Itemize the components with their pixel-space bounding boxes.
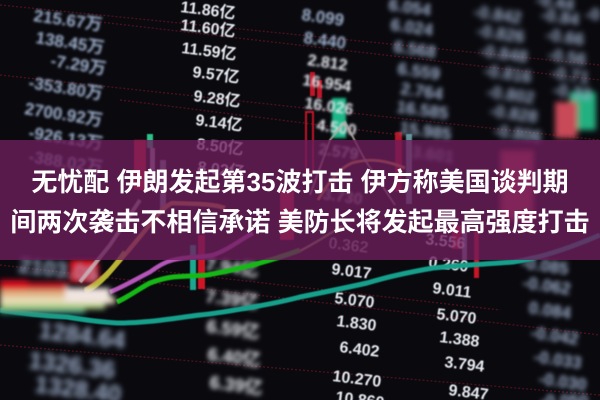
chart line: yellow xyxy=(85,252,125,292)
column 6 figures (blurred): -0.56 xyxy=(546,45,587,69)
lower column 4 figures: 3.794 xyxy=(444,354,485,376)
chart line: orange arc on right xyxy=(318,160,405,200)
lower centre figures (blurred) xyxy=(205,254,264,398)
lower left figures (blurred): 2103.05 xyxy=(17,252,99,287)
column 2 figures (hundred millions): 11.59亿 xyxy=(181,39,237,64)
lower column 5 figures (blurred): -0.030 xyxy=(537,369,588,395)
chart line: olive tail xyxy=(300,226,342,251)
lower left figures (blurred) xyxy=(17,252,127,400)
column 5 figures (blurred): -0.806 xyxy=(492,121,543,147)
column 5 figures (blurred): -0.842 xyxy=(472,2,523,28)
column 4 figures (blurred): 15.985 xyxy=(398,118,453,144)
lower column 5 figures (blurred): -0.062 xyxy=(521,273,572,299)
lower left figures (blurred): 1326.36 xyxy=(27,347,117,385)
lower column 3 figures xyxy=(328,235,385,400)
column 1 figures (ten-thousands): 138.45万 xyxy=(34,28,105,58)
column 3 figures: 16.026 xyxy=(303,95,354,119)
column 3 figures xyxy=(300,5,364,209)
lower column 3 figures: 6.402 xyxy=(339,339,380,361)
column 4 figures (blurred): 6.568 xyxy=(392,37,437,62)
column 1 figures (ten-thousands): -388.02万 xyxy=(27,147,104,178)
chart line: orange moving average xyxy=(85,203,225,290)
lower centre figures (blurred): 6.40亿 xyxy=(207,344,262,370)
column 6 figures (blurred): -0.71 xyxy=(549,63,590,87)
column 5 figures (blurred): -0.802 xyxy=(485,82,536,108)
column 3 figures: 8.099 xyxy=(300,5,345,30)
lower column 5 figures (blurred): -0.042 xyxy=(529,323,580,349)
lower centre figures (blurred): 7.39亿 xyxy=(205,286,260,312)
lower centre figures (blurred): 6.59亿 xyxy=(206,316,261,342)
column 5 figures (blurred): -0.848 xyxy=(478,41,529,67)
column 1 figures (ten-thousands): -353.80万 xyxy=(27,73,104,104)
column 2 figures (hundred millions): 9.28亿 xyxy=(193,87,242,111)
column 2 figures (hundred millions): 11.60亿 xyxy=(180,16,236,41)
column 4 figures (blurred): 6.559 xyxy=(396,59,441,84)
column 1 figures (ten-thousands): -926.13万 xyxy=(27,123,104,154)
column 5 figures (blurred): -0.828 xyxy=(488,101,539,127)
title: 间两次袭击不相信承诺 美防长将发起最高强度打击 xyxy=(10,207,590,237)
column 3 figures: 2.579 xyxy=(317,141,360,164)
chart line: green xyxy=(117,250,300,302)
column 1 figures (ten-thousands): -7.29万 xyxy=(49,51,107,79)
lower column 3 figures: 10.270 xyxy=(332,368,382,391)
column 3 figures: 2.812 xyxy=(306,52,349,75)
column 4 figures (blurred): 2.764 xyxy=(399,79,445,104)
column 5 figures (blurred) xyxy=(472,2,543,147)
column 5 figures (blurred): -0.826 xyxy=(475,21,526,47)
column 5 figures (blurred): -0.816 xyxy=(482,61,533,87)
column 2 figures (hundred millions): 8.50亿 xyxy=(196,135,245,159)
lower column 3 figures: 5.070 xyxy=(334,290,375,312)
column 3 figures: 4.500 xyxy=(315,117,358,140)
lower column 4 figures: 0.260 xyxy=(428,254,469,276)
column 3 figures: 8.440 xyxy=(302,28,347,53)
lower centre figures (blurred): 6.39亿 xyxy=(209,372,264,398)
lower column 5 figures (blurred): -0.033 xyxy=(532,347,583,373)
chart line: pale peak right xyxy=(310,122,395,205)
lower column 4 figures xyxy=(425,231,489,400)
column 2 figures (hundred millions): 9.14亿 xyxy=(195,111,244,135)
column 4 figures (blurred): 6.024 xyxy=(389,15,435,40)
lower column 5 figures (blurred) xyxy=(519,253,588,400)
candlesticks xyxy=(134,72,479,290)
blurred candles at far right xyxy=(70,92,596,282)
column 1 figures (ten-thousands): 215.67万 xyxy=(32,6,103,35)
column 1 figures (ten-thousands) xyxy=(23,6,107,178)
purple title band xyxy=(0,140,600,260)
column 3 figures: 16.954 xyxy=(301,72,352,96)
lower column 4 figures: 3.556 xyxy=(425,231,466,253)
lower column 5 figures (blurred): -0.085 xyxy=(519,253,570,279)
lower column 4 figures: 1.388 xyxy=(439,329,480,351)
chart line: pale rising line left xyxy=(80,200,140,282)
column 6 figures (blurred): -0.33 xyxy=(551,80,592,104)
column 6 figures (blurred): -0.66 xyxy=(544,25,585,49)
lower column 4 figures: 5.070 xyxy=(436,306,477,328)
column 2 figures (hundred millions) xyxy=(180,0,246,182)
column 6 figures (blurred) xyxy=(534,0,600,104)
column 2 figures (hundred millions): 8.02亿 xyxy=(197,158,246,182)
lower column 3 figures: 9.017 xyxy=(331,261,372,283)
lower left figures (blurred): 1284.64 xyxy=(37,317,127,355)
lower column 4 figures: 9.011 xyxy=(432,280,473,302)
rainbow blur at left xyxy=(0,280,115,314)
chart line: teal xyxy=(0,235,600,323)
column 4 figures (blurred): 3.601 xyxy=(410,142,455,167)
column 6 figures (blurred): -0 xyxy=(585,5,600,24)
lower centre figures (blurred): 7.94亿 xyxy=(205,254,260,280)
column 6 figures (blurred): -0.84 xyxy=(539,5,581,29)
lower column 3 figures: 0.362 xyxy=(328,235,369,257)
column 3 figures: 3.730 xyxy=(321,186,364,209)
column 4 figures (blurred) xyxy=(387,0,455,167)
title: 无忧配 伊朗发起第35波打击 伊方称美国谈判期 xyxy=(31,167,569,197)
lower column 5 figures (blurred): 0.084 xyxy=(527,298,573,323)
chart line: magenta xyxy=(110,233,253,292)
column 4 figures (blurred): 16.585 xyxy=(395,97,450,123)
lower column 3 figures: 1.830 xyxy=(336,313,377,335)
title xyxy=(10,167,590,237)
column 1 figures (ten-thousands): 2700.92万 xyxy=(23,99,104,130)
column 2 figures (hundred millions): 9.57亿 xyxy=(192,63,241,87)
